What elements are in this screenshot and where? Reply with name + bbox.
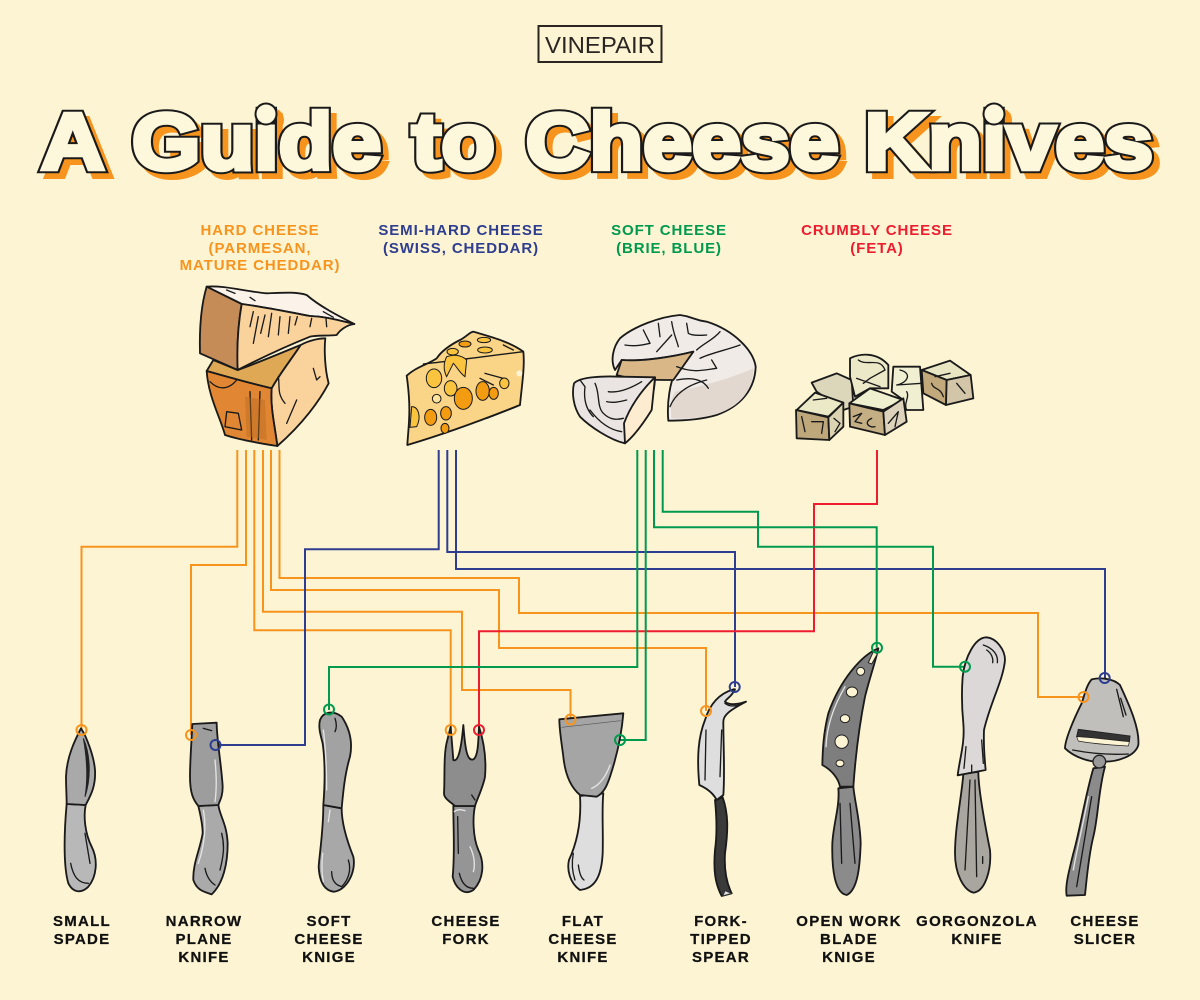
knife: cheese slicer — [1065, 678, 1138, 896]
label: open work blade knige: OPEN WORK — [796, 913, 902, 930]
heading: semi-hard cheese: (SWISS, CHEDDAR) — [383, 240, 539, 257]
label: small spade: SMALL — [53, 913, 111, 930]
heading: soft cheese: SOFT CHEESE — [611, 222, 727, 239]
title: Guide — [138, 103, 387, 192]
label: cheese slicer: SLICER — [1074, 931, 1136, 948]
title: to — [412, 97, 495, 186]
title: Cheese — [526, 97, 839, 186]
label: flat cheese knife: KNIFE — [557, 949, 609, 966]
heading: hard cheese: HARD CHEESE — [200, 222, 320, 239]
illustration: feta — [796, 355, 973, 440]
title: Knives — [871, 103, 1159, 192]
illustration: brie — [573, 315, 756, 443]
heading: hard cheese: MATURE CHEDDAR) — [180, 257, 340, 274]
heading: crumbly cheese: (FETA) — [850, 240, 904, 257]
label: soft cheese knige — [294, 913, 364, 966]
title: A — [47, 103, 111, 192]
label: small spade — [53, 913, 111, 948]
label: narrow plane knife — [166, 913, 242, 966]
knife: soft cheese knife — [319, 713, 354, 892]
label: fork-tipped spear: FORK- — [694, 913, 748, 930]
title: Guide — [132, 97, 381, 186]
knife: gorgonzola knife — [955, 637, 1005, 893]
knife: narrow plane knife — [190, 723, 228, 894]
heading: semi-hard cheese: SEMI-HARD CHEESE — [378, 222, 544, 239]
title: to — [418, 103, 501, 192]
heading: semi-hard cheese — [378, 222, 544, 257]
logo: VinePair — [538, 26, 662, 62]
title — [41, 97, 1159, 192]
title: Cheese — [526, 97, 839, 186]
knife: flat cheese knife — [559, 713, 623, 890]
label: flat cheese knife: FLAT — [562, 913, 604, 930]
label: flat cheese knife: CHEESE — [548, 931, 618, 948]
heading: soft cheese: (BRIE, BLUE) — [616, 240, 722, 257]
title: A — [41, 97, 105, 186]
label: flat cheese knife — [548, 913, 618, 966]
title: to — [412, 97, 495, 186]
label: small spade: SPADE — [54, 931, 110, 948]
label: cheese slicer — [1070, 913, 1140, 948]
label: cheese fork: CHEESE — [431, 913, 501, 930]
label: cheese fork: FORK — [442, 931, 490, 948]
label: narrow plane knife: NARROW — [166, 913, 242, 930]
knife: cheese fork — [444, 725, 485, 892]
heading: crumbly cheese — [801, 222, 953, 257]
heading: crumbly cheese: CRUMBLY CHEESE — [801, 222, 953, 239]
heading: hard cheese — [180, 222, 340, 274]
label: cheese slicer: CHEESE — [1070, 913, 1140, 930]
knife: fork-tipped spear — [698, 689, 746, 896]
label: narrow plane knife: KNIFE — [178, 949, 230, 966]
heading: soft cheese — [611, 222, 727, 257]
title: Knives — [865, 97, 1153, 186]
connector lines — [82, 450, 1105, 745]
label: open work blade knige — [796, 913, 902, 966]
logo: VinePair: VINEPAIR — [545, 32, 655, 58]
title: Cheese — [532, 103, 845, 192]
label: cheese fork — [431, 913, 501, 948]
label: open work blade knige: KNIGE — [822, 949, 876, 966]
illustration: hard cheese — [200, 286, 354, 446]
label: fork-tipped spear — [690, 913, 752, 966]
knife: open work blade knife — [822, 648, 878, 895]
connector endpoints — [76, 643, 1110, 750]
knife: small spade — [65, 728, 96, 891]
title: Guide — [132, 97, 381, 186]
label: fork-tipped spear: TIPPED — [690, 931, 752, 948]
label: gorgonzola knife: KNIFE — [951, 931, 1003, 948]
label: gorgonzola knife — [916, 913, 1038, 948]
heading: hard cheese: (PARMESAN, — [209, 240, 311, 257]
label: open work blade knige: BLADE — [820, 931, 878, 948]
label: soft cheese knige: KNIGE — [302, 949, 356, 966]
label: narrow plane knife: PLANE — [175, 931, 233, 948]
label: soft cheese knige: CHEESE — [294, 931, 364, 948]
label: fork-tipped spear: SPEAR — [692, 949, 750, 966]
label: gorgonzola knife: GORGONZOLA — [916, 913, 1038, 930]
illustration: swiss cheese — [407, 332, 524, 445]
title: Knives — [865, 97, 1153, 186]
label: soft cheese knige: SOFT — [306, 913, 352, 930]
title: A — [41, 97, 105, 186]
